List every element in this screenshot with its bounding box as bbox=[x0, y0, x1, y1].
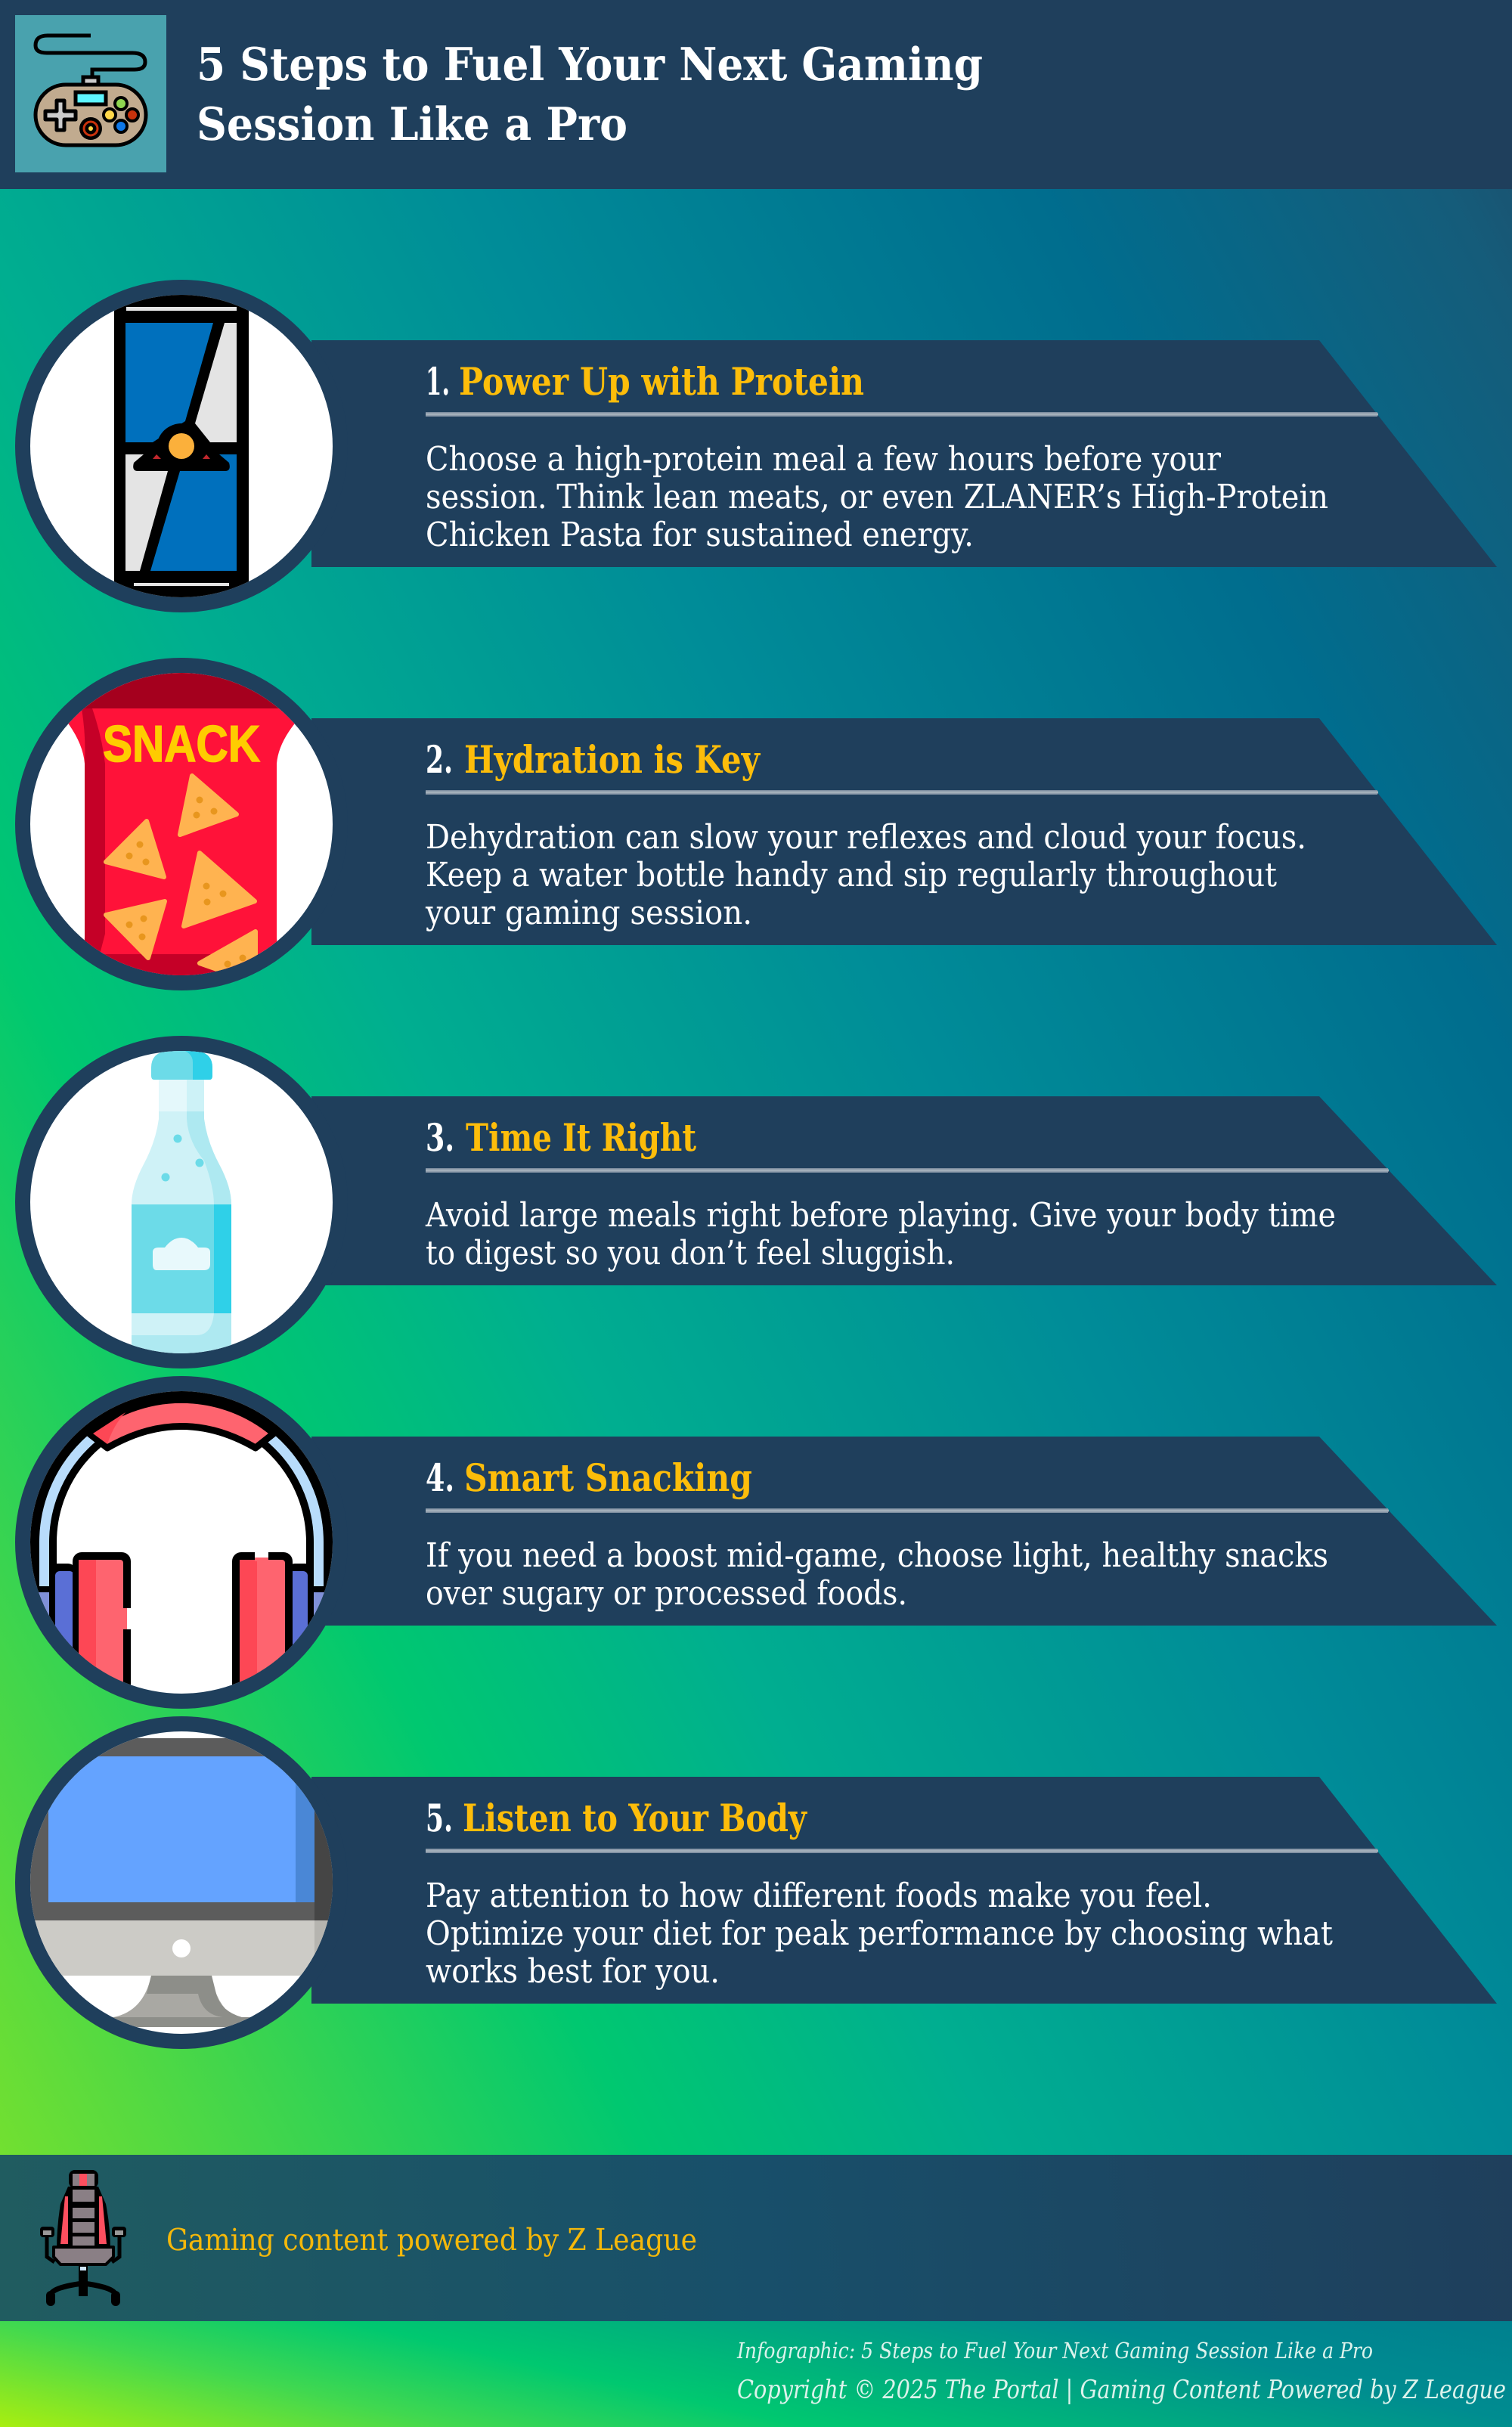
title bbox=[197, 39, 983, 151]
title: Session Like a Pro bbox=[197, 98, 627, 151]
step 4 text bbox=[426, 1536, 1328, 1613]
step 5 text: Optimize your diet for peak performance by choosing what bbox=[426, 1914, 1333, 1953]
step 2 text: your gaming session. bbox=[425, 894, 752, 932]
icon: snack bag: SNACK bbox=[103, 715, 260, 773]
step 2 text: Dehydration can slow your reflexes and cloud your focus. bbox=[426, 818, 1306, 857]
step 5 text: Pay attention to how different foods make you feel. bbox=[426, 1877, 1212, 1915]
icon: desktop monitor bbox=[15, 1716, 348, 2049]
step 1 text bbox=[426, 440, 1328, 554]
panel: step 3 banner bbox=[311, 1096, 1497, 1285]
step 3 text: to digest so you don’t feel sluggish. bbox=[426, 1234, 955, 1272]
step 5 text: works best for you. bbox=[426, 1952, 720, 1991]
step 2 heading: 2. bbox=[426, 737, 453, 782]
step 3 heading: Time It Right bbox=[466, 1115, 696, 1160]
icon: gaming chair bbox=[40, 2170, 126, 2306]
step 1 text: session. Think lean meats, or even ZLANER’s High-Protein bbox=[426, 478, 1328, 516]
step 1 heading: Power Up with Protein bbox=[459, 359, 864, 404]
step 4 text: If you need a boost mid-game, choose light, healthy snacks bbox=[426, 1536, 1328, 1575]
icon: snack bag bbox=[15, 658, 348, 990]
credits text: Infographic: 5 Steps to Fuel Your Next Gaming Session Like a Pro bbox=[736, 2338, 1373, 2363]
icon: game controller bbox=[15, 15, 166, 172]
step 4 heading: Smart Snacking bbox=[464, 1455, 752, 1500]
panel: step 2 banner bbox=[311, 718, 1497, 945]
footer text: Gaming content powered by Z League bbox=[166, 2223, 697, 2258]
header bar bbox=[0, 0, 1512, 189]
step 4 heading: 4. bbox=[426, 1455, 454, 1500]
step 3 text bbox=[425, 1196, 1336, 1272]
step 2 heading: Hydration is Key bbox=[464, 737, 761, 782]
step 5 heading: Listen to Your Body bbox=[463, 1796, 808, 1840]
panel: step 5 banner bbox=[311, 1777, 1497, 2004]
step 1 heading: 1. bbox=[426, 359, 450, 404]
title: 5 Steps to Fuel Your Next Gaming bbox=[197, 39, 983, 91]
icon: energy drink can bbox=[15, 280, 348, 612]
step 2 text bbox=[425, 818, 1306, 932]
footer bar bbox=[0, 2155, 1512, 2321]
step 5 heading: 5. bbox=[426, 1796, 453, 1840]
step 4 text: over sugary or processed foods. bbox=[426, 1574, 907, 1613]
step 1 text: Chicken Pasta for sustained energy. bbox=[426, 516, 974, 554]
step 2 text: Keep a water bottle handy and sip regularly throughout bbox=[426, 856, 1277, 894]
step 1 text: Choose a high-protein meal a few hours before your bbox=[426, 440, 1222, 479]
step 3 text: Avoid large meals right before playing. Give your body time bbox=[425, 1196, 1336, 1235]
panel: step 4 banner bbox=[311, 1437, 1497, 1626]
icon: headphones bbox=[15, 1376, 348, 1719]
step 3 heading: 3. bbox=[426, 1115, 454, 1160]
credits text bbox=[736, 2338, 1506, 2405]
step 5 text bbox=[426, 1877, 1333, 1991]
panel: step 1 banner bbox=[311, 340, 1497, 567]
icon: water bottle bbox=[15, 1036, 348, 1368]
